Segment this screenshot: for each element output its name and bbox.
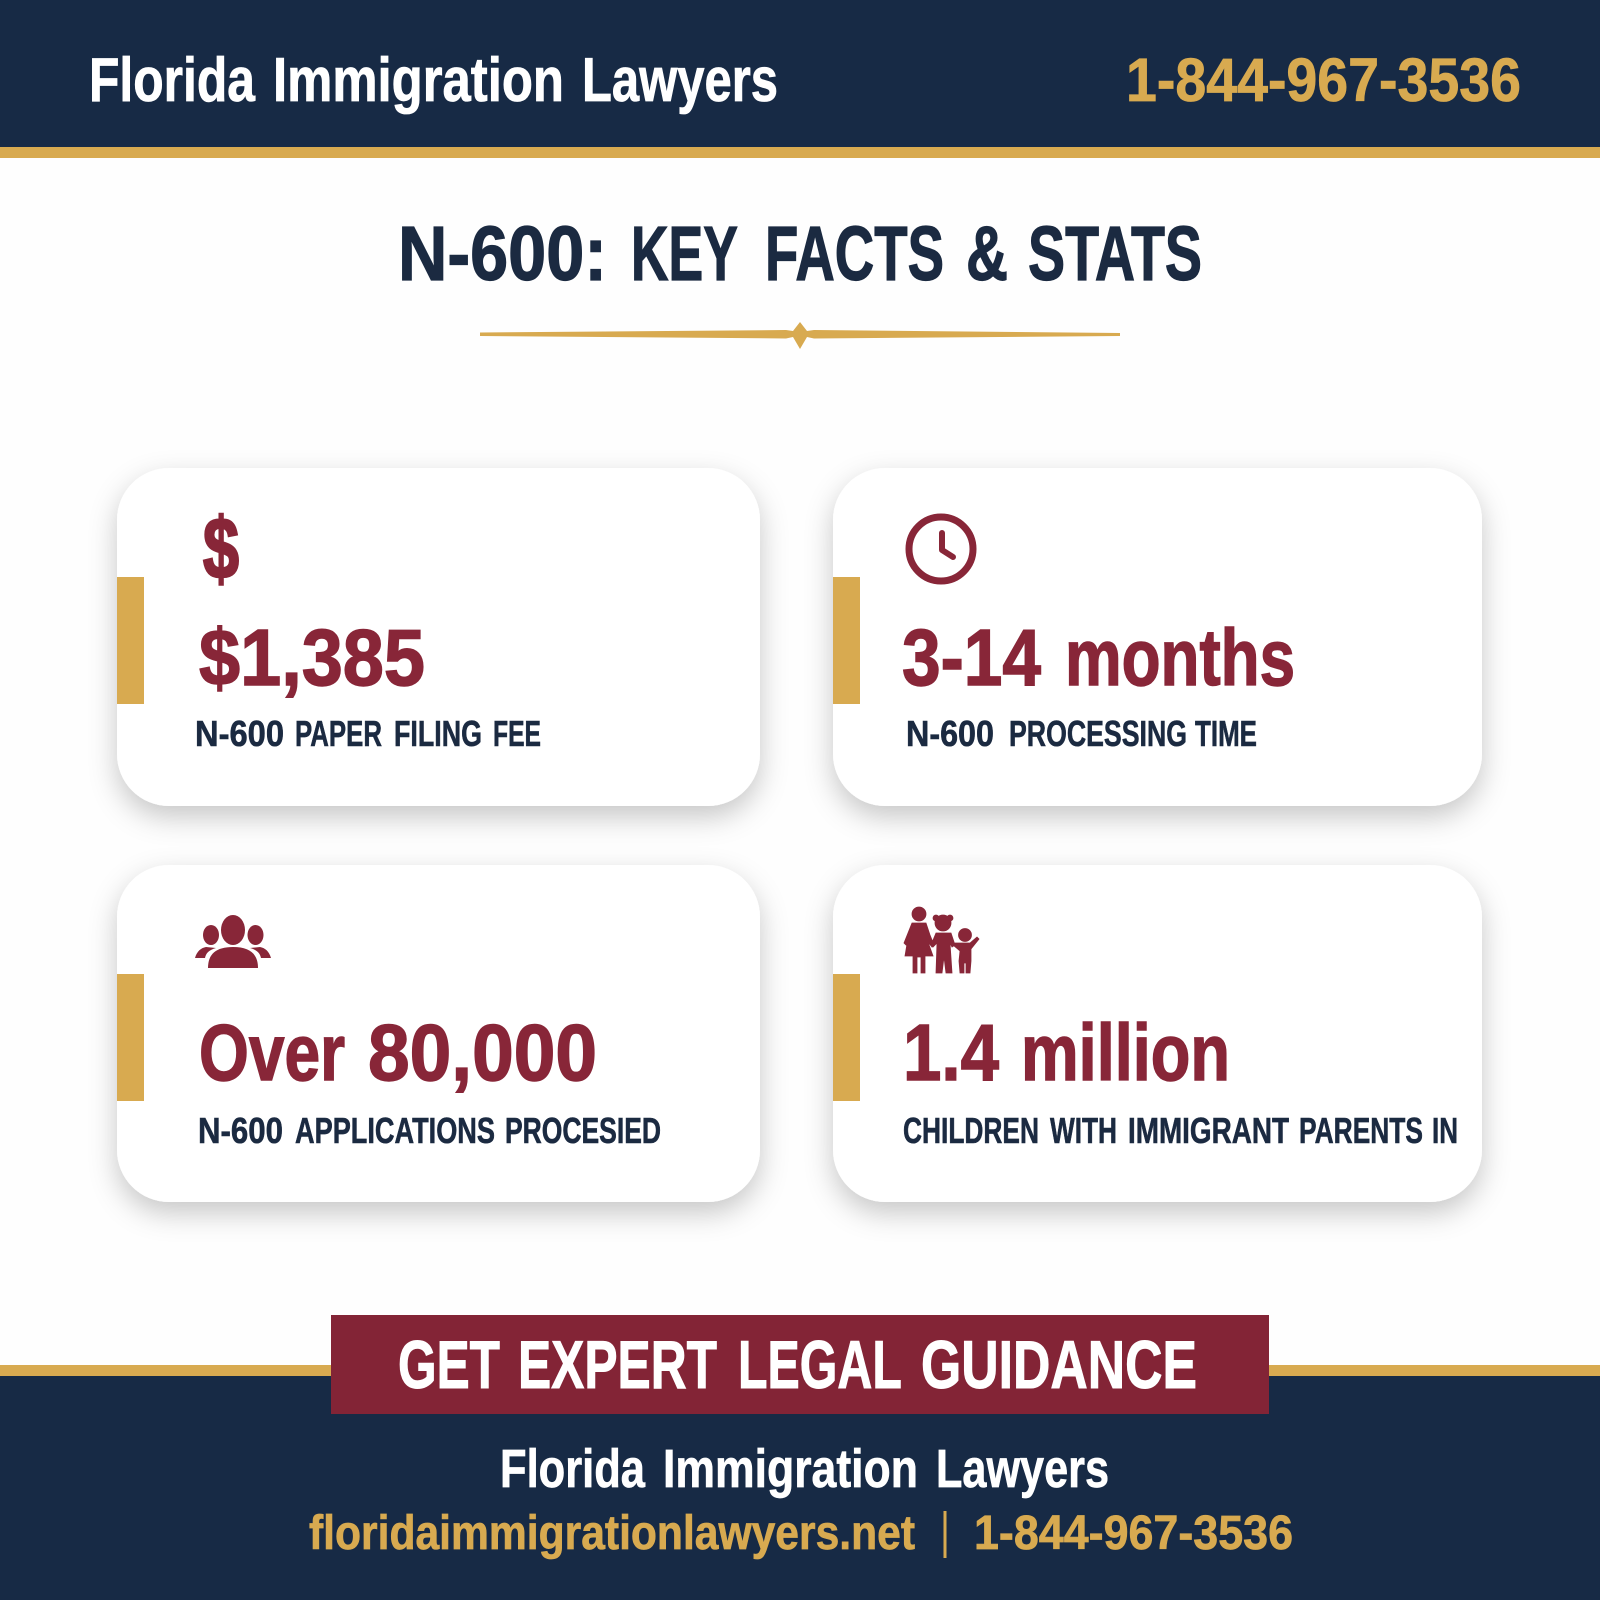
stat value: months (1065, 613, 1295, 702)
stat label: CHILDREN (903, 1110, 1039, 1151)
stat label: FEE (493, 713, 541, 754)
stat label: IN (1432, 1110, 1458, 1151)
call-to-action banner (331, 1315, 1269, 1414)
icon: group of people (195, 915, 271, 968)
panel: processing time card (833, 468, 1482, 806)
header firm name: Florida (89, 46, 255, 115)
stat label: PARENTS (1299, 1110, 1423, 1151)
icon: clock (909, 517, 973, 581)
panel: applications card (117, 865, 760, 1202)
icon: family (904, 907, 979, 973)
gold accent bar (833, 577, 860, 704)
footer firm name: Lawyers (936, 1439, 1109, 1499)
title: STATS (1028, 211, 1202, 297)
footer firm name: Florida (500, 1439, 646, 1499)
title: KEY (631, 211, 738, 297)
footer phone number: 1-844-967-3536 (974, 1507, 1293, 1560)
panel: filing fee card (117, 468, 760, 806)
title: FACTS (765, 211, 944, 297)
stat label: N-600 (198, 1110, 283, 1151)
stat label: TIME (1195, 713, 1257, 754)
gold accent bar (117, 577, 144, 704)
gold accent bar (117, 974, 144, 1101)
stat value: Over (199, 1008, 345, 1097)
stat label: APPLICATIONS (295, 1110, 495, 1151)
header bar (0, 0, 1600, 158)
footer website: floridaimmigrationlawyers.net (309, 1507, 915, 1560)
footer separator (944, 1511, 946, 1558)
footer firm name: Immigration (663, 1439, 918, 1499)
title divider with diamond (480, 322, 1120, 349)
banner text: GET (398, 1327, 500, 1403)
stat label: N-600 (195, 713, 284, 754)
stat value: 3-14 (902, 613, 1041, 702)
stat label: FILING (394, 713, 482, 754)
stat label: PROCESSING (1009, 713, 1187, 754)
stat label: PAPER (295, 713, 382, 754)
banner text: LEGAL (738, 1327, 901, 1403)
header firm name: Immigration (273, 46, 564, 115)
banner text: GUIDANCE (921, 1327, 1197, 1403)
header firm name: Lawyers (582, 46, 778, 115)
footer band (0, 1365, 1600, 1600)
icon: dollar sign: $ (203, 501, 239, 597)
stat value: 80,000 (368, 1008, 597, 1097)
title: N-600: (398, 211, 607, 297)
stat label: WITH (1050, 1110, 1117, 1151)
header phone number: 1-844-967-3536 (1126, 46, 1521, 114)
panel: children card (833, 865, 1482, 1202)
stat value: 1.4 (903, 1008, 999, 1097)
stat value: million (1021, 1008, 1230, 1097)
stat label: IMMIGRANT (1128, 1110, 1289, 1151)
banner text: EXPERT (518, 1327, 717, 1403)
gold accent bar (833, 974, 860, 1101)
title: & (966, 211, 1008, 297)
stat label: N-600 (906, 713, 994, 754)
stat label: PROCESIED (505, 1110, 661, 1151)
stat value: $1,385 (199, 613, 425, 702)
